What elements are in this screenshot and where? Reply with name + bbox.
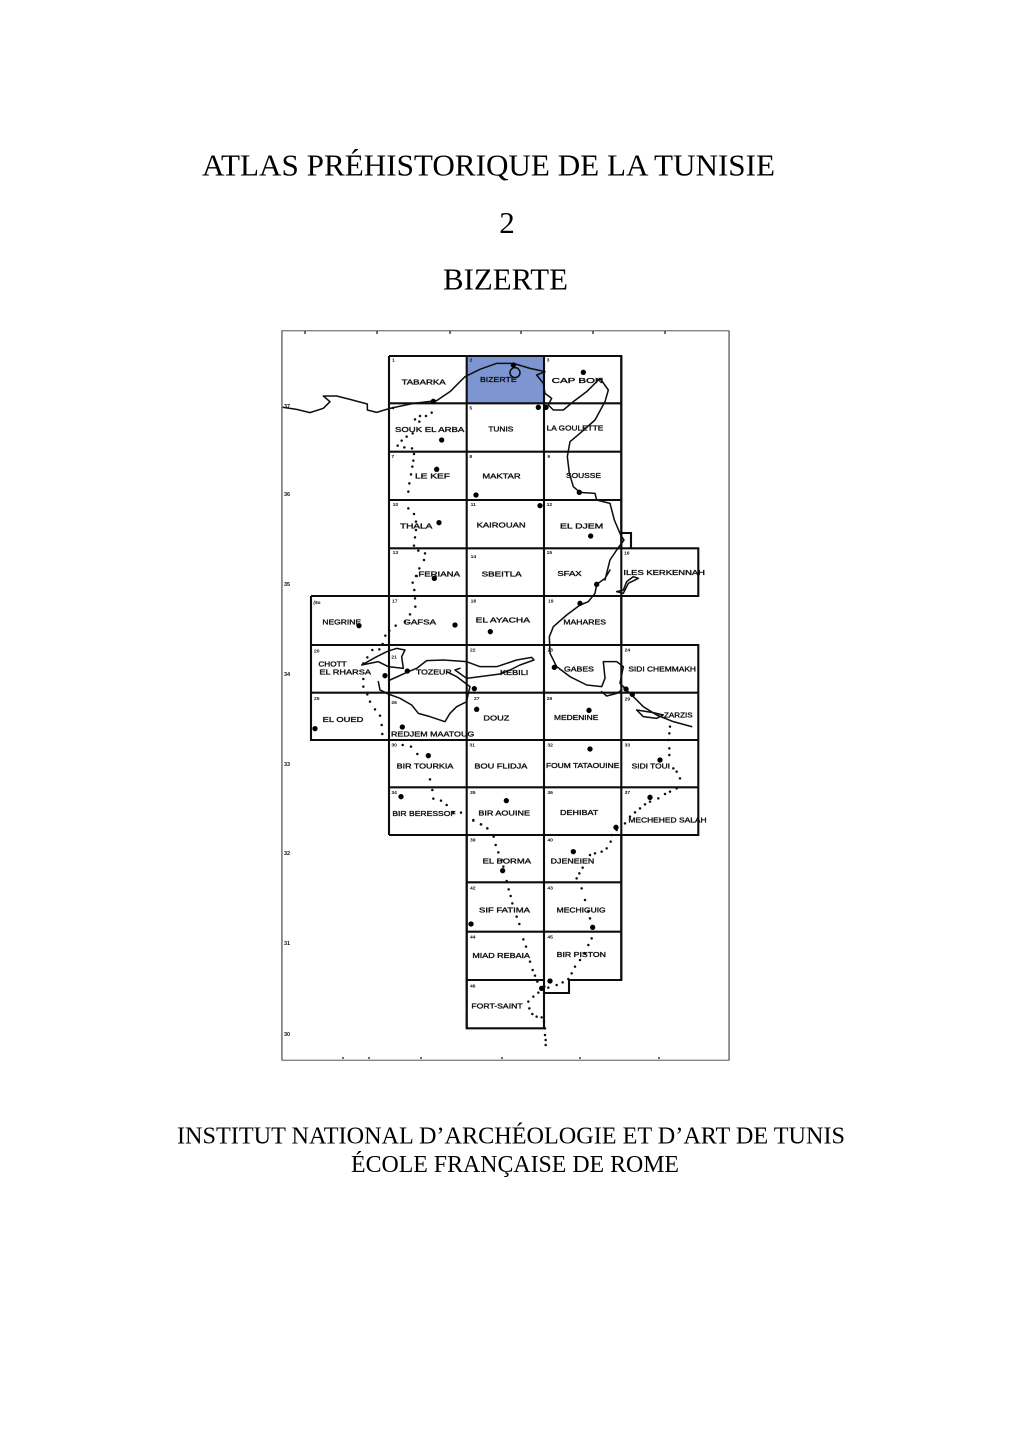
sheet grid	[311, 356, 698, 1028]
sheet labels, centre: GAFSA	[403, 617, 437, 626]
sheet numbers, centre: 18	[471, 599, 476, 605]
sheet numbers, centre: 30	[391, 743, 397, 749]
map: index of atlas sheets of Tunisia	[282, 330, 729, 1060]
sheet labels, centre: BIR TOURKIA	[397, 761, 454, 770]
sheet labels, centre: SIDI TOUI	[632, 761, 670, 770]
sheet labels, centre: GABES	[564, 665, 594, 674]
sheet labels, north: KAIROUAN	[477, 521, 526, 530]
map ticks and latitude labels: 32	[284, 851, 290, 857]
sheet labels, centre: BIR BERESSOF	[392, 809, 456, 818]
sheet labels, centre	[318, 616, 707, 825]
sheet numbers, north: 4	[391, 405, 394, 411]
sheet numbers, centre: 21	[391, 655, 397, 661]
sheet labels, south: FORT-SAINT	[471, 1001, 523, 1010]
map ticks and latitude labels: 31	[284, 941, 290, 947]
sheet labels, centre: CHOTT	[318, 659, 347, 668]
sheet labels, north: MAKTAR	[482, 471, 521, 480]
sheet numbers, north: 9	[547, 454, 550, 460]
upper map section	[283, 357, 705, 580]
localities and dotted frontier, centre	[363, 576, 680, 828]
sheet labels, centre: NEGRINE	[322, 617, 361, 626]
coastline and border, north	[283, 363, 624, 580]
sheet numbers, north: 5	[469, 405, 472, 411]
sheet numbers, north: 1	[392, 357, 395, 363]
map ticks and latitude labels: 36	[284, 492, 290, 498]
sheet numbers, north: 13	[393, 550, 398, 556]
localities and dotted frontier, north	[398, 413, 432, 576]
sheet labels, north: ILES KERKENNAH	[623, 568, 705, 577]
southern map section	[470, 821, 617, 1045]
sheet labels, north: CAP BON	[552, 376, 603, 385]
sheet numbers, centre: 37	[625, 790, 630, 796]
sheet numbers, centre: 32	[547, 743, 553, 749]
sheet labels, centre: FOUM TATAOUINE	[546, 761, 619, 770]
sheet labels, centre: DOUZ	[483, 713, 510, 722]
sheet numbers, south	[470, 838, 553, 989]
sheet labels, north	[395, 375, 705, 579]
sheet labels, centre: KEBILI	[500, 668, 528, 677]
sheet labels, centre: REDJEM MAATOUG	[391, 729, 474, 738]
sheet numbers, centre: 35	[470, 790, 476, 796]
sheet numbers, north: 12	[547, 502, 552, 508]
sheet numbers, south: 43	[547, 885, 553, 891]
sheet numbers, centre: 27	[474, 696, 480, 702]
sheet numbers, centre: 24	[625, 648, 630, 654]
sheet labels, centre: ZARZIS	[664, 711, 693, 720]
map ticks and latitude labels: 34	[284, 672, 291, 678]
central map section	[313, 570, 707, 828]
sheet numbers, centre: 34	[391, 790, 397, 796]
sheet labels, north: SBEITLA	[482, 570, 523, 579]
sheet labels, south: DJENEIEN	[551, 856, 594, 865]
sheet labels, centre: BOU FLIDJA	[474, 762, 528, 771]
sheet labels, centre: BIR AOUINE	[478, 809, 530, 818]
highlighted sheet: Bizerte	[467, 356, 544, 404]
sheet numbers, north: 2	[470, 357, 473, 363]
coastline and chotts, centre	[362, 570, 692, 727]
sheet numbers, north: 11	[471, 502, 476, 508]
sheet numbers, north: 8	[469, 454, 472, 460]
localities and dotted frontier, south	[473, 821, 617, 1045]
sheet labels, north: FERIANA	[418, 569, 461, 578]
sheet numbers, centre: 17	[392, 599, 398, 605]
sheet numbers, north	[391, 357, 630, 560]
sheet numbers, north: 7	[391, 454, 394, 460]
map ticks and latitude labels: 30	[284, 1032, 290, 1038]
sheet numbers, centre: 36	[547, 790, 553, 796]
sheet labels, north: TABARKA	[402, 377, 447, 386]
sheet numbers, centre: (5a	[313, 600, 321, 606]
sheet numbers, north: 16	[624, 551, 630, 557]
sheet numbers, south: 39	[470, 838, 476, 844]
publisher: school: ÉCOLE FRANÇAISE DE ROME	[351, 1152, 679, 1178]
sheet labels, centre: EL AYACHA	[476, 616, 531, 625]
sheet labels, north: BIZERTE	[480, 375, 517, 384]
sheet labels, centre: MEDENINE	[554, 713, 598, 722]
sheet numbers, centre: 22	[470, 648, 476, 654]
sheet labels, centre: TOZEUR	[416, 667, 452, 676]
sheet labels, south: EL BORMA	[483, 856, 532, 865]
sheet numbers, north: 10	[393, 502, 398, 508]
sheet labels, south: MIAD REBAIA	[472, 951, 531, 960]
sheet numbers, north: 14	[471, 554, 476, 560]
sheet labels, north: THALA	[400, 521, 433, 530]
sheet labels, north: EL DJEM	[560, 521, 603, 530]
map frame	[282, 330, 729, 1060]
sheet numbers, south: 42	[470, 885, 476, 891]
sheet labels, south: BIR PISTON	[557, 950, 606, 959]
sheet labels, north: SOUK EL ARBA	[395, 425, 465, 434]
sheet numbers, centre: 25	[314, 696, 320, 702]
sheet numbers, centre: 29	[625, 697, 630, 703]
map ticks and latitude labels: 35	[284, 582, 290, 588]
sheet labels, centre: EL OUED	[323, 715, 364, 724]
map ticks and latitude labels	[284, 331, 665, 1059]
sheet labels, centre: EL RHARSA	[319, 668, 372, 677]
map ticks and latitude labels: 33	[284, 762, 290, 768]
sheet numbers, centre: 19	[548, 599, 554, 605]
sheet labels, centre: MAHARES	[563, 618, 606, 627]
sheet labels, north: SFAX	[557, 569, 582, 578]
heading: Bizerte: BIZERTE	[443, 262, 568, 297]
sheet numbers, centre: 28	[547, 696, 552, 702]
sheet labels, north: TUNIS	[488, 424, 513, 433]
sheet labels, south: SIF FATIMA	[479, 906, 531, 915]
sheet labels, centre: MECHEHED SALAH	[628, 816, 707, 825]
sheet numbers, south: 44	[470, 934, 476, 940]
sheet numbers, centre: 20	[314, 648, 320, 654]
title: atlas name: ATLAS PRÉHISTORIQUE DE LA TUNISIE	[202, 148, 775, 183]
sheet labels, south	[471, 856, 606, 1010]
publisher: institute: INSTITUT NATIONAL D’ARCHÉOLOGIE ET D’ART DE TUNIS	[177, 1123, 845, 1149]
sheet numbers, north: 15	[547, 550, 552, 556]
sheet labels, centre: SIDI CHEMMAKH	[628, 665, 696, 674]
sheet labels, south: MECHIGUIG	[557, 906, 606, 915]
sheet labels, centre: DEHIBAT	[560, 808, 599, 817]
sheet numbers, centre: 33	[625, 743, 630, 749]
sheet numbers, centre: 23	[547, 648, 553, 654]
map ticks and latitude labels: 37	[284, 404, 290, 410]
sheet labels, north: LA GOULETTE	[547, 423, 603, 432]
sheet labels, north: LE KEF	[415, 471, 450, 480]
sheet numbers, centre	[313, 599, 630, 796]
sheet numbers, south: 46	[470, 983, 476, 989]
volume number: 2	[499, 205, 515, 240]
sheet numbers, north: 3	[547, 357, 550, 363]
sheet numbers, south: 40	[547, 838, 553, 844]
sheet labels, north: SOUSSE	[566, 471, 601, 480]
sheet numbers, centre: 31	[469, 743, 475, 749]
sheet numbers, south: 45	[547, 934, 553, 940]
sheet numbers, centre: 26	[391, 700, 397, 706]
